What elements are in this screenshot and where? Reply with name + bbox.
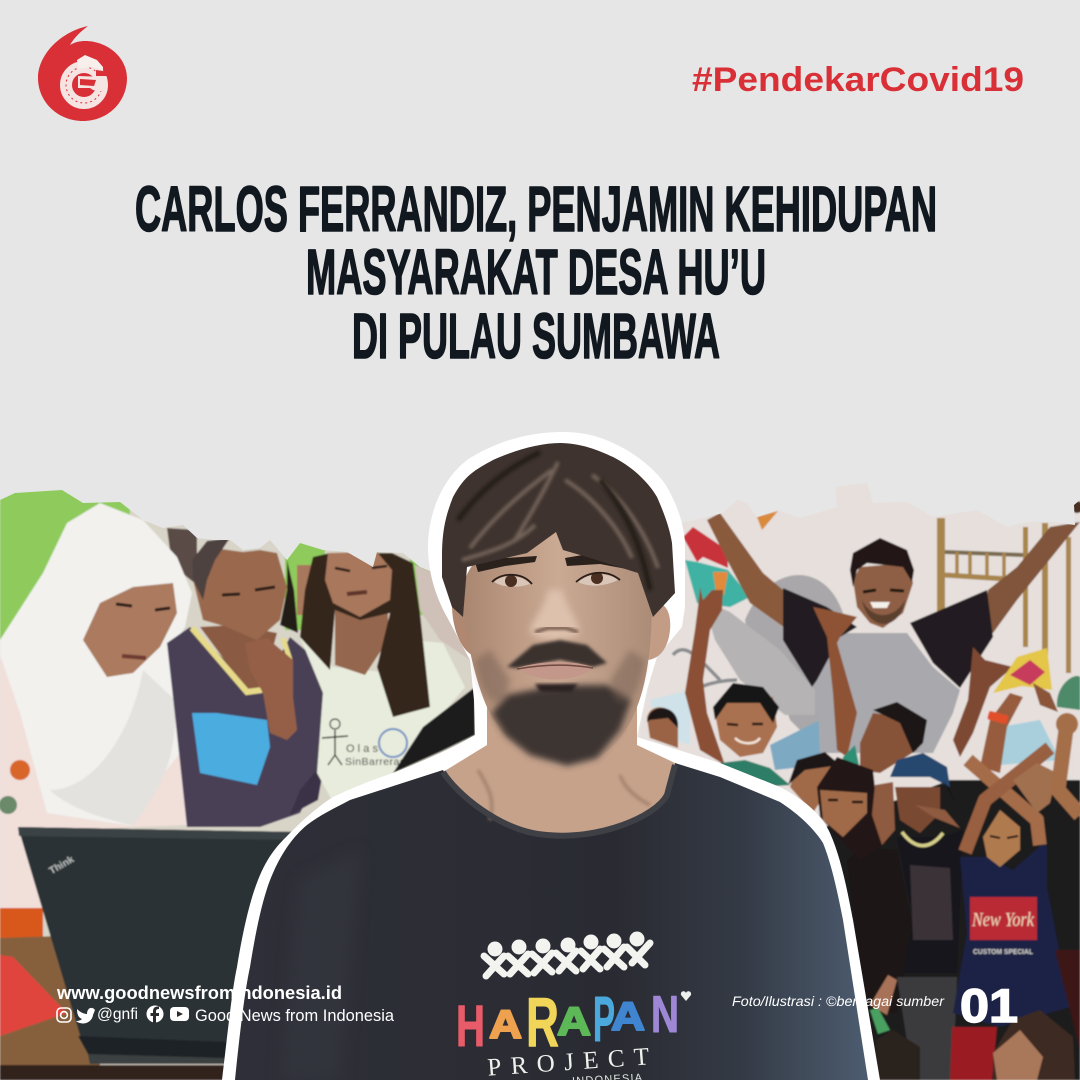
child behind, left [789, 765, 832, 812]
black shoulder behind portrait [393, 687, 475, 773]
shirt collar [443, 765, 675, 836]
boy in navy New York shirt: CUSTOM SPECIAL [973, 947, 1033, 956]
icon: facebook [146, 1006, 164, 1023]
pink sleeve of hijab girl [0, 640, 190, 910]
white cutout outline [222, 432, 880, 1080]
right ear [646, 604, 670, 660]
icon: youtube [170, 1007, 189, 1021]
shirt logo: heart [681, 991, 691, 1001]
raised arm: center boy [813, 607, 857, 757]
laptop [18, 827, 300, 1065]
title: DI PULAU SUMBAWA [352, 300, 720, 372]
hair strands [462, 462, 658, 568]
shirt logo: HARAPAN: P [593, 983, 615, 1055]
t-shirt [235, 763, 868, 1080]
hashtag: #PendekarCovid19 [692, 61, 1024, 99]
face [463, 530, 652, 768]
lips [517, 662, 593, 680]
small boy at far left [647, 707, 678, 748]
shirt logo: HARAPAN: H [456, 994, 485, 1059]
shirt logo: HARAPAN: A [489, 1003, 522, 1047]
nose [530, 590, 580, 640]
photo: children at laptop [0, 480, 490, 1080]
shirt wrinkles [280, 850, 360, 1080]
footer left: website and socials: Good News from Indonesia [195, 1006, 395, 1025]
footer left: website and socials: @gnfi [97, 1006, 138, 1023]
title [135, 173, 937, 372]
eyes [492, 572, 620, 587]
girl in black [816, 756, 898, 1035]
neck [443, 700, 675, 834]
boy in cap [872, 753, 963, 1080]
logo: red 6 with eagle G [38, 26, 127, 121]
icon: instagram [57, 1008, 71, 1022]
hijab girl [0, 503, 192, 826]
left ear [452, 605, 472, 655]
footer left: website and socials: www.goodnewsfromindonesia.id [56, 982, 342, 1003]
stubble beard [492, 685, 631, 766]
girl in purple and blue shirt [167, 538, 325, 827]
footer left: website and socials [56, 982, 395, 1025]
shirt logo: HARAPAN: R [526, 983, 559, 1061]
photo credit: Foto/Ilustrasi : ©berbagai sumber [732, 994, 945, 1009]
photo: man with children [640, 480, 1080, 1080]
shirt logo: HARAPAN [456, 983, 679, 1061]
orange cloth [0, 908, 43, 945]
laptop: Think [47, 854, 76, 877]
hair [442, 443, 675, 617]
arms and card at right [953, 647, 1058, 773]
center boy [842, 702, 927, 775]
under-lip patch [535, 684, 578, 692]
page number: 01 [960, 979, 1018, 1032]
mustache [507, 640, 607, 668]
table [0, 936, 100, 1065]
neck shading [478, 770, 650, 820]
man [707, 501, 1080, 753]
raised arm: left boy [685, 587, 725, 765]
portrait: Carlos Ferrandiz cutout [222, 432, 880, 1080]
red pants [950, 1027, 997, 1080]
shirt logo: HARAPAN: N [651, 986, 679, 1044]
eyebrows [475, 552, 637, 572]
boy with peace sign [713, 683, 790, 790]
shirt logo: HARAPAN: A [611, 995, 645, 1039]
mural [683, 527, 728, 568]
group of children base [826, 779, 1080, 1080]
bottom left child [875, 1030, 920, 1080]
girl in white shirt [300, 552, 465, 802]
icon: twitter [76, 1008, 95, 1023]
book [0, 955, 67, 1036]
child at right edge [1013, 713, 1080, 1050]
bottom child [993, 1010, 1075, 1080]
shirt print: SinBarreras [345, 756, 405, 768]
boy in navy New York shirt [953, 748, 1070, 1027]
shirt print: Olas [346, 743, 378, 755]
ladder [937, 518, 945, 613]
shirt print [322, 719, 407, 768]
shirt logo: HARAPAN: A [557, 1000, 591, 1044]
boy in navy New York shirt: New York [971, 909, 1035, 931]
shirt logo: paper people chain [484, 932, 650, 976]
